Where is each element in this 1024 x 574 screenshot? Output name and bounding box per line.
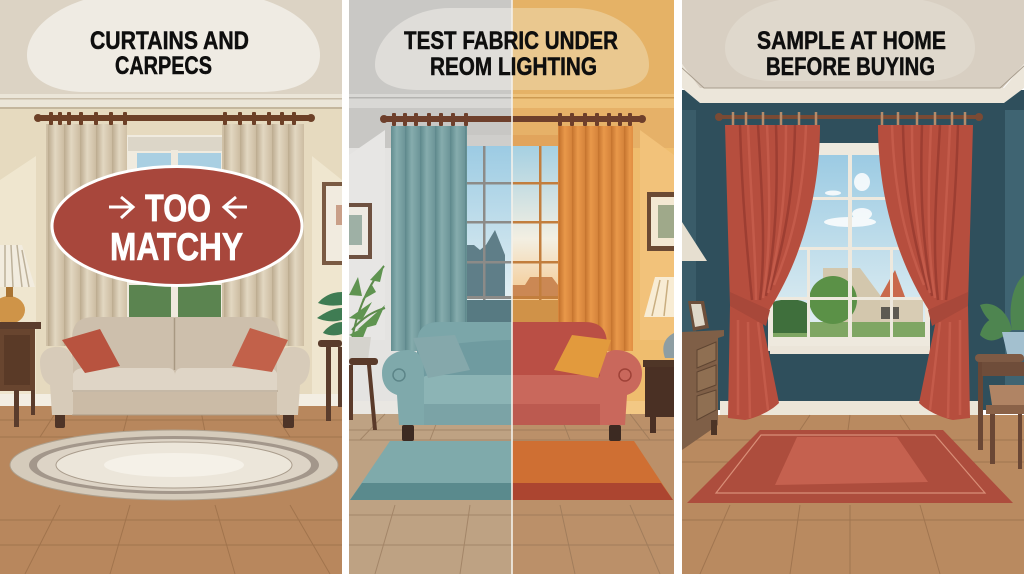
center divider <box>511 0 513 574</box>
tieback <box>730 292 770 326</box>
arrows pointing inward <box>109 197 247 218</box>
heading bubble <box>725 0 975 81</box>
tieback <box>928 292 968 326</box>
teal curtain <box>391 126 467 351</box>
baseboard <box>720 401 980 416</box>
panel: curtains and carpets <box>0 0 344 574</box>
dresser <box>682 330 724 450</box>
heading: sample at home before buying: BEFORE BUYING <box>766 53 935 81</box>
right curtain <box>222 124 304 346</box>
window <box>768 143 930 351</box>
small framed picture <box>688 301 709 331</box>
orange curtain <box>558 126 633 351</box>
plant <box>349 265 385 360</box>
left red curtain <box>725 125 820 420</box>
text: too matchy: TOO <box>145 188 211 230</box>
wall light patches <box>0 156 36 400</box>
window <box>467 135 558 325</box>
red rug <box>687 430 1013 503</box>
lamp <box>644 277 674 358</box>
text: too matchy <box>112 194 243 261</box>
wood floor <box>0 406 342 574</box>
heading: test fabric under room lighting: TEST FABRIC UNDER <box>404 27 618 55</box>
round rug <box>10 430 338 500</box>
ceiling <box>0 0 342 94</box>
warm side background <box>607 148 674 401</box>
ceiling <box>682 0 1024 90</box>
heading: sample at home before buying: SAMPLE AT HOME <box>757 27 946 55</box>
crown moulding <box>682 64 1024 103</box>
panel: test fabric under room lighting <box>349 0 674 574</box>
baseboard <box>349 401 512 415</box>
badge: too matchy <box>52 166 302 286</box>
heading bubble <box>27 0 320 92</box>
plant and round table <box>317 292 342 421</box>
heading: test fabric under room lighting: REOM LIGHTING <box>430 53 597 81</box>
lamp <box>0 245 35 324</box>
heading: curtains and carpecs <box>90 31 248 74</box>
side table <box>643 360 674 433</box>
wood floor <box>349 414 674 574</box>
red half of sofa <box>512 322 642 441</box>
panel: sample at home before buying <box>682 0 1024 574</box>
teal half of sofa <box>382 322 512 441</box>
left red pillow <box>62 329 120 373</box>
plant <box>980 275 1024 358</box>
wood floor <box>682 415 1024 574</box>
orange rug half <box>512 441 673 500</box>
right framed picture <box>647 192 674 251</box>
heading: test fabric under room lighting <box>404 27 618 81</box>
curtain rings <box>733 112 965 127</box>
left curtain <box>46 124 127 346</box>
teal pillow <box>413 335 470 378</box>
teal rug half <box>350 441 512 500</box>
curtain rod <box>715 113 983 121</box>
stool <box>986 385 1024 469</box>
beige sofa <box>40 317 310 428</box>
right red pillow <box>232 328 288 372</box>
side table <box>0 322 41 427</box>
round table <box>975 354 1024 450</box>
right red curtain <box>878 125 973 420</box>
heading bubble <box>375 8 512 90</box>
yellow pillow <box>554 335 611 378</box>
cool side background <box>349 148 417 401</box>
curtain rod <box>380 113 646 126</box>
wall <box>682 90 1024 410</box>
stool <box>349 358 378 430</box>
window sill <box>770 346 930 354</box>
heading: curtains and carpecs: CURTAINS AND <box>90 27 249 55</box>
left framed picture <box>349 203 372 259</box>
curtain rod <box>34 112 315 125</box>
window <box>127 135 223 320</box>
baseboard <box>0 394 342 407</box>
heading: sample at home before buying <box>757 27 946 81</box>
lamp shade <box>682 222 707 261</box>
heading: curtains and carpecs: CARPECS <box>115 52 212 80</box>
framed picture <box>322 182 344 265</box>
text: too matchy: MATCHY <box>110 226 243 269</box>
